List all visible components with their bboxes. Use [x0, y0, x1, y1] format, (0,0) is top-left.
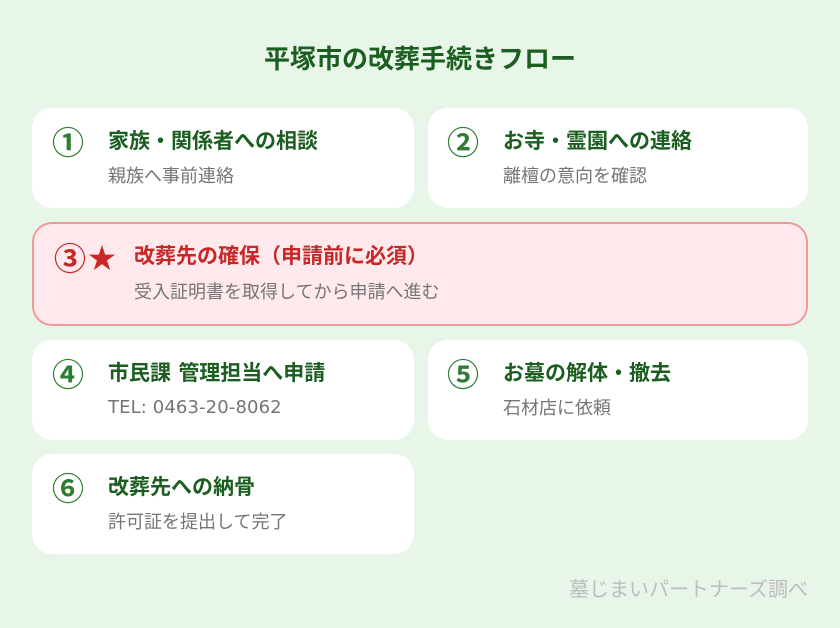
step 2 number: ②	[447, 118, 479, 164]
step 6 text: 許可証を提出して完了	[108, 508, 287, 534]
step 1 heading: 家族・関係者への相談	[108, 125, 318, 155]
step 6 number: ⑥	[52, 464, 84, 510]
step 3 heading: 改葬先の確保（申請前に必須）	[134, 240, 428, 270]
panel: step 4	[32, 340, 414, 440]
step 6 heading: 改葬先への納骨	[108, 471, 255, 501]
panel: step 1	[32, 108, 414, 208]
step 1 text: 親族へ事前連絡	[108, 162, 234, 188]
step 4 heading: 市民課 管理担当へ申請	[108, 357, 325, 387]
panel: step 2	[428, 108, 808, 208]
step 3 number: ③	[54, 234, 86, 280]
step 5 text: 石材店に依頼	[503, 394, 611, 420]
icon: star: ★	[88, 237, 116, 277]
step 1 number: ①	[52, 118, 84, 164]
step 5 heading: お墓の解体・撤去	[503, 357, 671, 387]
panel: step 6	[32, 454, 414, 554]
step 2 text: 離檀の意向を確認	[503, 162, 647, 188]
step 4 number: ④	[52, 350, 84, 396]
panel: step 3 highlighted	[32, 222, 808, 326]
panel: step 5	[428, 340, 808, 440]
source credit: 墓じまいパートナーズ調べ	[569, 573, 808, 602]
title: 平塚市の改葬手続きフロー	[264, 39, 576, 76]
step 5 number: ⑤	[447, 350, 479, 396]
step 3 text: 受入証明書を取得してから申請へ進む	[134, 278, 439, 304]
step 4 text: TEL: 0463-20-8062	[108, 397, 282, 418]
step 2 heading: お寺・霊園への連絡	[503, 125, 692, 155]
